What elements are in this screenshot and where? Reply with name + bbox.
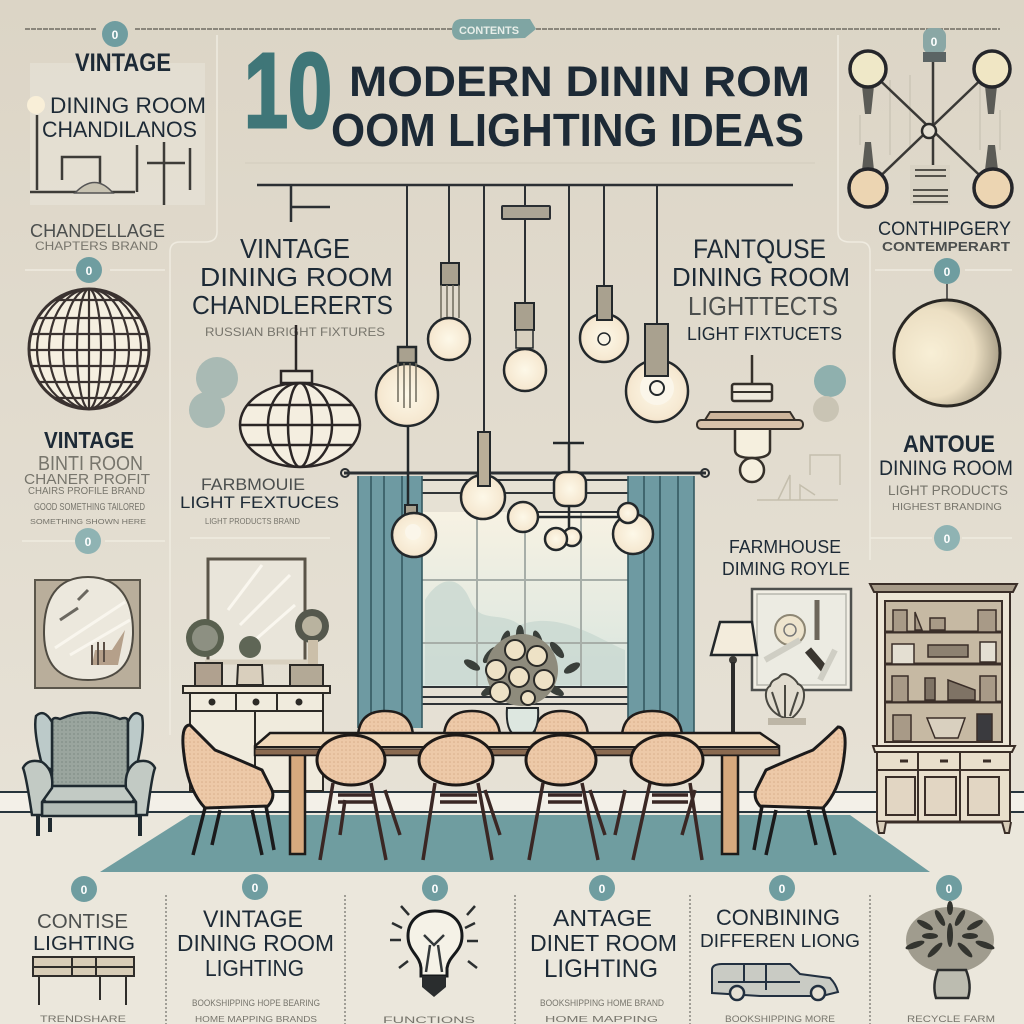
footer card: vintage: DINING ROOM xyxy=(177,930,334,956)
footer card: antique: DINET ROOM xyxy=(530,930,677,956)
footer card: antique: HOME MAPPING xyxy=(545,1015,658,1024)
rug xyxy=(100,815,930,872)
footer card: combining xyxy=(700,875,860,1024)
text: farmhouse light fixtures: FARBMOUIE xyxy=(201,475,305,494)
panel: right moon lamp: ANTOUE xyxy=(903,431,995,458)
footer card: console xyxy=(33,876,135,1024)
dining table xyxy=(255,733,779,854)
footer icon: light bulb: 0 xyxy=(432,882,439,896)
footer card: vintage xyxy=(177,874,334,1024)
text: farmhouse light fixtures: LIGHT PRODUCTS BRAND xyxy=(205,517,300,526)
window with curtains xyxy=(341,469,709,732)
footer card: combining: DIFFEREN LIONG xyxy=(700,931,860,951)
footer card: vintage: VINTAGE xyxy=(203,906,303,933)
footer card: antique xyxy=(530,875,677,1024)
lighting rail and hanging cords xyxy=(257,185,793,443)
panel: top left vintage chandeliers: CHANDILANOS xyxy=(42,117,197,142)
chandelier: centre-left globe xyxy=(189,325,360,467)
panel: left mirror xyxy=(35,528,140,688)
panel: left globe vintage: CHANER PROFIT xyxy=(24,471,150,488)
panel: right moon lamp: LIGHT PRODUCTS xyxy=(888,482,1008,498)
footer icon: potted plant: 0 xyxy=(946,882,953,896)
top badge xyxy=(452,19,536,40)
panel: top left vintage chandeliers: CHAPTERS BRAND xyxy=(35,239,158,253)
footer card: antique: BOOKSHIPPING HOME BRAND xyxy=(540,998,664,1008)
panel: right moon lamp: HIGHEST BRANDING xyxy=(892,502,1002,513)
footer card: combining: CONBINING xyxy=(716,905,840,930)
text: farmhouse light fixtures: LIGHT FEXTUCES xyxy=(180,493,339,512)
panel: centre right heading: DINING ROOM xyxy=(672,262,850,292)
title: 10 xyxy=(244,32,332,150)
title: MODERN DININ ROM xyxy=(349,58,810,106)
footer card: console: 0 xyxy=(81,883,88,897)
panel: centre left heading: DINING ROOM xyxy=(200,262,393,292)
panel: centre right heading xyxy=(672,234,850,344)
footer card: antique: ANTAGE xyxy=(553,905,652,931)
panel: top left vintage chandeliers xyxy=(27,21,206,253)
title: OOM LIGHTING IDEAS xyxy=(331,104,804,156)
text: farmhouse dining: FARMHOUSE xyxy=(729,537,841,557)
panel: top right contemporary xyxy=(849,28,1012,254)
panel: top right contemporary: CONTHIPGERY xyxy=(878,219,1011,240)
icon: right pendant xyxy=(697,355,846,500)
panel: centre left heading: RUSSIAN BRIGHT FIXTURES xyxy=(205,325,385,339)
text: farmhouse dining xyxy=(722,537,850,579)
top badge: CONTENTS xyxy=(459,25,519,37)
footer card: antique: 0 xyxy=(599,882,606,896)
front chairs xyxy=(317,735,703,860)
panel: centre left heading: VINTAGE xyxy=(240,233,350,264)
footer card: vintage: HOME MAPPING BRANDS xyxy=(195,1015,317,1024)
footer icon: light bulb xyxy=(383,875,478,1024)
panel: centre right heading: FANTQUSE xyxy=(693,234,826,264)
floor and baseboard xyxy=(0,792,1024,1024)
panel: right moon lamp: 0 xyxy=(944,532,951,546)
panel: centre left heading xyxy=(192,233,393,339)
panel: right moon lamp: 0 xyxy=(944,265,951,279)
footer card: vintage: LIGHTING xyxy=(205,955,304,981)
coral ornament xyxy=(766,674,806,725)
panel: top left vintage chandeliers: DINING ROOM xyxy=(50,93,206,118)
panel: top left vintage chandeliers: CHANDELLAGE xyxy=(30,221,165,241)
footer card: antique: LIGHTING xyxy=(544,955,658,983)
text: farmhouse dining: DIMING ROYLE xyxy=(722,559,850,579)
footer icon: potted plant xyxy=(905,875,995,1024)
footer card: combining: 0 xyxy=(779,882,786,896)
panel: left mirror: 0 xyxy=(85,535,92,549)
footer card: console: LIGHTING xyxy=(33,933,135,955)
side chairs xyxy=(183,725,845,855)
panel: top left vintage chandeliers: VINTAGE xyxy=(75,49,171,77)
panel: centre right heading: LIGHT FIXTUCETS xyxy=(687,324,842,344)
panel: right moon lamp: DINING ROOM xyxy=(879,457,1013,480)
floor lamp xyxy=(711,622,757,733)
title xyxy=(244,32,810,156)
panel: left globe vintage xyxy=(24,257,150,524)
bookcase xyxy=(870,584,1017,833)
panel: right moon lamp xyxy=(879,258,1013,551)
panel: left globe vintage: CHAIRS PROFILE BRAND xyxy=(28,486,145,497)
pendant bulbs xyxy=(376,263,688,557)
panel: left globe vintage: 0 xyxy=(86,264,93,278)
panel: left globe vintage: BINTI ROON xyxy=(38,453,143,475)
icon: armchair xyxy=(23,712,155,836)
footer card: console: TRENDSHARE xyxy=(40,1014,126,1024)
panel: centre left heading: CHANDLERERTS xyxy=(192,290,393,320)
footer icon: potted plant: RECYCLE FARM xyxy=(907,1014,995,1024)
footer card: vintage: 0 xyxy=(252,881,259,895)
picture frame xyxy=(752,589,851,690)
footer card: console: CONTISE xyxy=(37,911,128,933)
footer card: vintage: BOOKSHIPPING HOPE BEARING xyxy=(192,998,320,1008)
panel: left globe vintage: GOOD SOMETHING TAILORED xyxy=(34,502,145,513)
panel: left globe vintage: VINTAGE xyxy=(44,427,134,453)
back chairs xyxy=(358,711,682,735)
panel: centre right heading: LIGHTTECTS xyxy=(688,291,838,321)
panel: top left vintage chandeliers: 0 xyxy=(112,28,119,42)
wall mirror and sideboard xyxy=(183,559,330,791)
text: farmhouse light fixtures xyxy=(180,475,339,526)
bouquet vase xyxy=(462,625,582,737)
panel: top right contemporary: 0 xyxy=(931,35,938,49)
footer card: combining: BOOKSHIPPING MORE xyxy=(725,1014,835,1024)
panel: left globe vintage: SOMETHING SHOWN HERE xyxy=(30,519,146,526)
panel: top right contemporary: CONTEMPERART xyxy=(882,239,1010,254)
